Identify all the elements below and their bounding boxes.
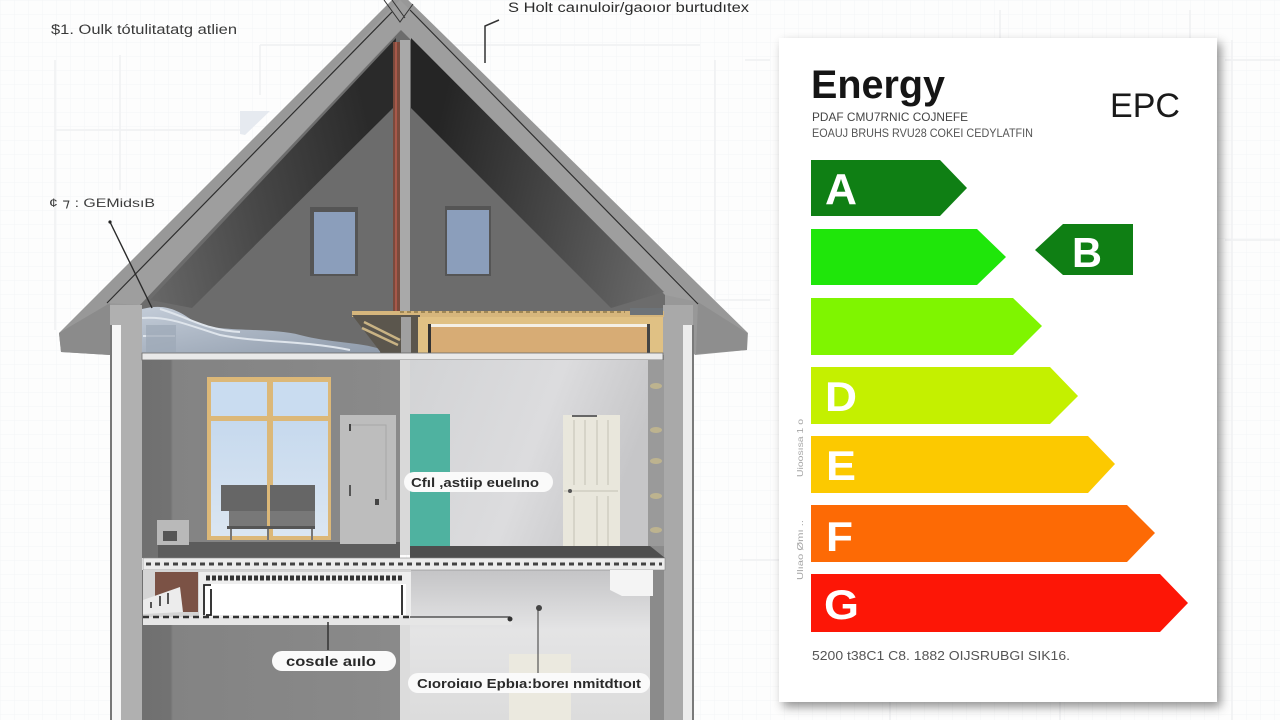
attic insulation rolls bbox=[142, 307, 380, 353]
rating bar F bbox=[811, 505, 1155, 562]
window with frame bbox=[207, 377, 331, 540]
upper left room bbox=[142, 360, 400, 558]
upper ceiling slab bbox=[142, 353, 663, 360]
leader: underfloor pill bbox=[327, 622, 329, 650]
underfloor services bbox=[143, 570, 411, 617]
vertical side text: Uioosısa 1 o bbox=[796, 418, 805, 477]
upper right floor bbox=[410, 546, 665, 558]
rating bar G bbox=[811, 574, 1188, 632]
teal panel bbox=[410, 414, 450, 546]
callout: left attic insulation label bbox=[49, 196, 155, 308]
rating bar A bbox=[811, 160, 967, 216]
rating bar D: D bbox=[825, 373, 857, 420]
callout: top left label: $1. Oulk tótulitatatg atlien bbox=[51, 22, 237, 37]
chimney behind roof bbox=[240, 111, 270, 135]
subtitle line 2: EOAUJ BRUHS RVU28 COKEI CEDYLATFIN bbox=[812, 126, 1033, 140]
current rating marker B: B bbox=[1072, 229, 1102, 276]
vertical side text: Ulıao Ømı .. bbox=[796, 520, 805, 580]
white duct box bbox=[610, 570, 653, 596]
cabinet door bbox=[340, 415, 396, 544]
callout pill: wall label bbox=[404, 472, 553, 492]
callout: left attic insulation label: ¢ ⁊ : GEMidsıB bbox=[49, 196, 155, 210]
lower left room bbox=[142, 570, 400, 720]
ridge detail bbox=[384, 0, 413, 22]
callout pill: wall label: Cfıl ,astiip euelıno bbox=[411, 475, 539, 490]
rating bar E bbox=[811, 436, 1115, 493]
rating bar B bbox=[811, 229, 1006, 285]
floor slab with joists bbox=[143, 558, 665, 570]
left wall bbox=[110, 305, 142, 720]
attic right window bbox=[445, 206, 491, 276]
callout: top right label: S Holt caınuloir/gaoıor burtudıtex bbox=[508, 0, 749, 15]
upper right room bbox=[410, 360, 650, 546]
attic insulation board box bbox=[352, 308, 664, 354]
right wall bbox=[650, 305, 694, 720]
door bbox=[563, 415, 620, 546]
lower right room bbox=[410, 570, 650, 720]
callout pill: lower room label bbox=[408, 673, 650, 693]
leader: lower room pill bbox=[536, 605, 542, 675]
heading: Energy bbox=[811, 63, 946, 107]
footer note: 5200 t38C1 C8. 1882 OIJSRUBGI SIK16. bbox=[812, 648, 1070, 663]
EPC label: EPC bbox=[1110, 87, 1180, 125]
rating bar G: G bbox=[824, 581, 859, 628]
central column bbox=[400, 360, 410, 555]
callout pill: underfloor label: cosɑle aıılo bbox=[286, 654, 376, 669]
central post with brick strip bbox=[393, 40, 410, 312]
roof outer shell bbox=[59, 0, 748, 355]
rating bar A: A bbox=[825, 165, 857, 214]
attic left window bbox=[310, 207, 358, 276]
lower central column bbox=[400, 625, 410, 720]
attic back wall bbox=[140, 30, 665, 353]
ladder pegs bbox=[648, 360, 664, 546]
rating bar E: E bbox=[826, 442, 856, 489]
house cross-section bbox=[59, 0, 748, 720]
card background bbox=[779, 38, 1217, 702]
panel: energy performance certificate bbox=[779, 38, 1217, 702]
current rating marker B bbox=[1035, 224, 1133, 276]
side table bbox=[157, 520, 189, 545]
sofa bbox=[221, 485, 315, 540]
rating bar D bbox=[811, 367, 1078, 424]
attic shadow right bbox=[411, 38, 664, 308]
rating bar F: F bbox=[826, 513, 853, 560]
lower slab bbox=[143, 616, 512, 625]
callout pill: underfloor label bbox=[272, 651, 396, 671]
callout: top right label bbox=[485, 0, 749, 63]
attic shadow left bbox=[150, 38, 396, 308]
lower door ghost bbox=[509, 654, 571, 720]
vertical side text bbox=[796, 418, 805, 580]
subtitle line 1: PDAF CMU7RNIC COJNEFE bbox=[812, 110, 968, 124]
rating bar C bbox=[811, 298, 1042, 355]
callout pill: lower room label: Cıoroiɑıo Epbıa:boreı nmitdtıoıt bbox=[417, 676, 642, 691]
